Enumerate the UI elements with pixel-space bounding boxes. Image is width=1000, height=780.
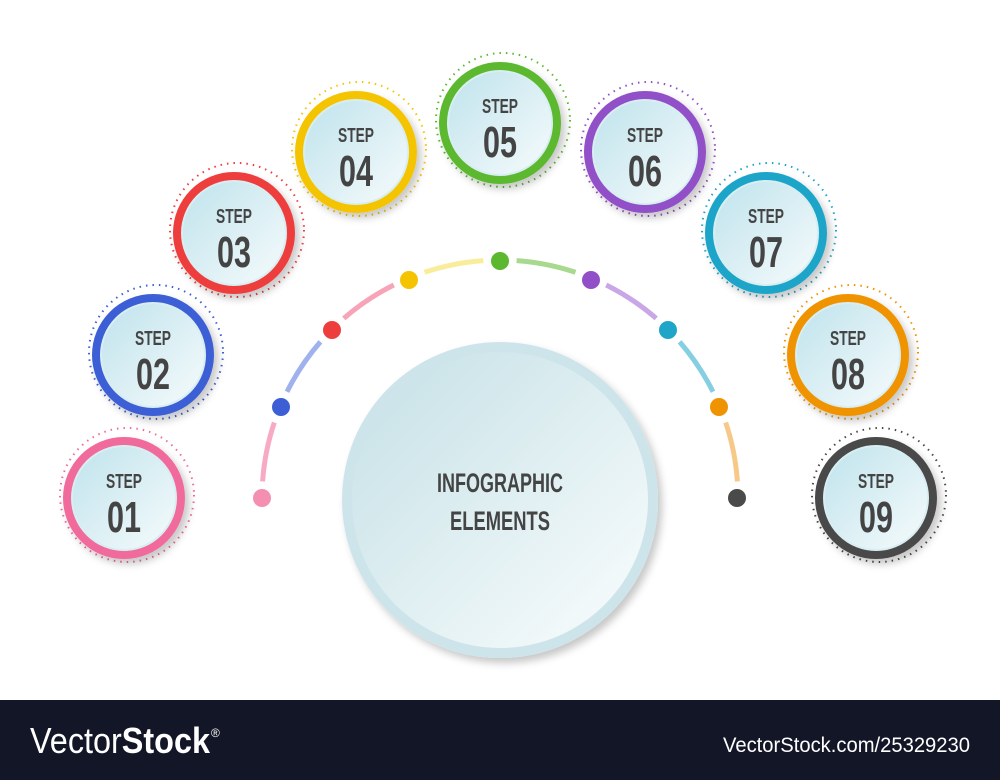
step 03: 03: [217, 228, 251, 277]
step 04: 04: [339, 147, 373, 196]
step 02: [89, 285, 223, 419]
footer bar: VectorStock.com/25329230: [723, 734, 970, 757]
step 02: 02: [136, 350, 170, 399]
footer bar: ®: [211, 726, 220, 740]
step 06: 06: [628, 147, 662, 196]
step 09: [812, 428, 946, 562]
step 07: STEP: [748, 206, 784, 228]
step 01: STEP: [106, 471, 142, 493]
step 07: 07: [749, 228, 783, 277]
step 01: 01: [107, 493, 141, 542]
step 04: STEP: [338, 125, 374, 147]
timeline dots: [253, 252, 746, 507]
step 09: 09: [859, 493, 893, 542]
step 06: STEP: [627, 125, 663, 147]
step 05: 05: [483, 118, 517, 167]
step 02: STEP: [135, 328, 171, 350]
step 08: [784, 285, 918, 419]
step 05: [436, 53, 570, 187]
footer bar: VectorStock: [30, 720, 211, 761]
step 07: [702, 163, 836, 297]
step 08: STEP: [830, 328, 866, 350]
step 08: 08: [831, 350, 865, 399]
step 04: [292, 82, 426, 216]
arc timeline: [263, 261, 737, 481]
step 06: [581, 82, 715, 216]
step 03: STEP: [216, 206, 252, 228]
step 01: [60, 428, 194, 562]
footer bar: [0, 700, 1000, 780]
center circle: INFOGRAPHIC: [437, 468, 563, 498]
step 03: [170, 163, 304, 297]
center circle: ELEMENTS: [450, 506, 550, 536]
step 05: STEP: [482, 96, 518, 118]
center circle: [342, 342, 658, 658]
step 09: STEP: [858, 471, 894, 493]
